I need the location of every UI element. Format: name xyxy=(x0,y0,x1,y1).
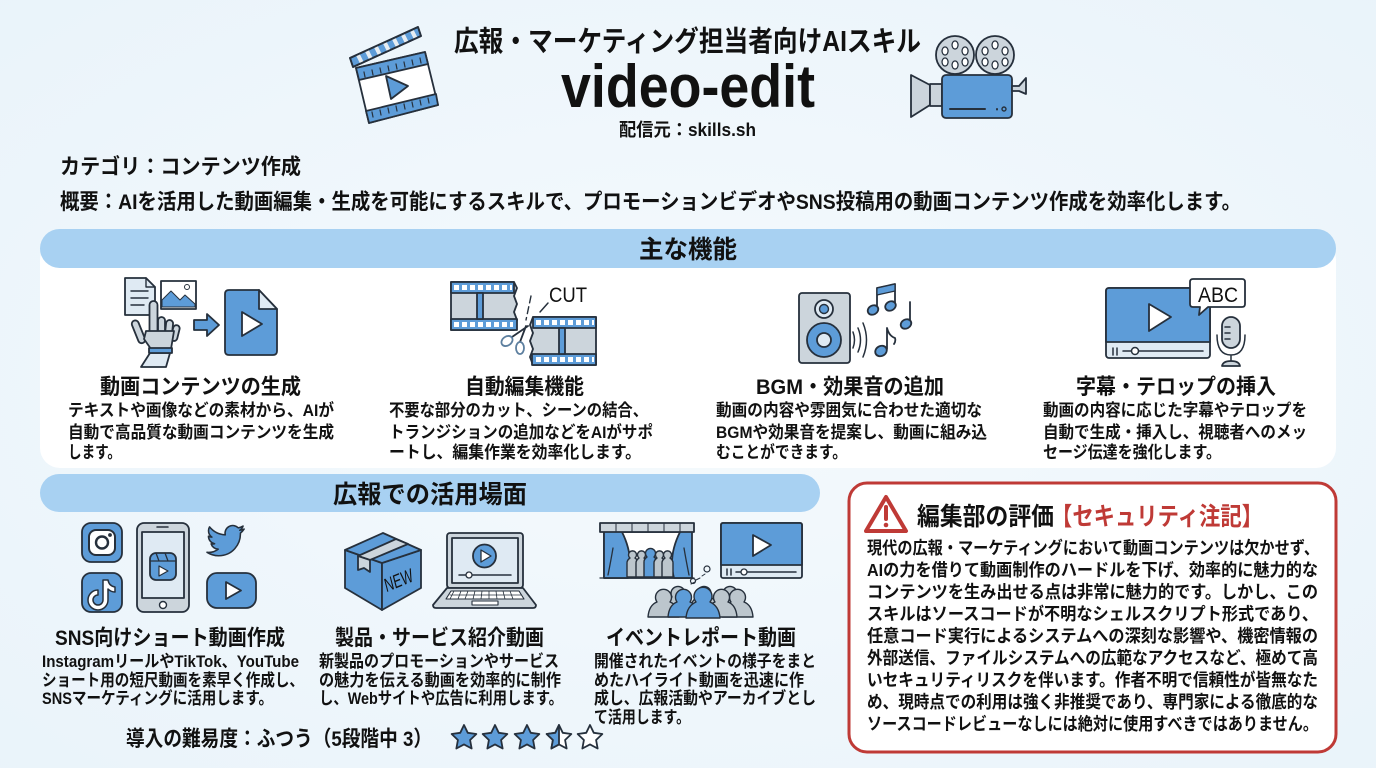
description: ートし、編集作業を効率化します。 xyxy=(389,443,641,462)
panel: PR use cases xyxy=(40,474,820,727)
description xyxy=(42,652,304,708)
description xyxy=(319,651,563,708)
description xyxy=(594,652,816,727)
description: します。 xyxy=(68,443,121,462)
description: の魅力を伝える動画を効率的に制作 xyxy=(319,670,561,690)
heading: BGM・効果音の追加 xyxy=(756,375,944,399)
heading: security note: 【セキュリティ注記】 xyxy=(1051,503,1263,531)
heading: 自動編集機能 xyxy=(465,375,584,399)
icon: speaker and music notes xyxy=(799,284,913,363)
description: むことができます。 xyxy=(716,442,847,462)
text: category: カテゴリ：コンテンツ作成 xyxy=(60,154,301,179)
description: 自動で高品質な動画コンテンツを生成 xyxy=(68,422,334,442)
description: 新製品のプロモーションやサービス xyxy=(319,651,559,671)
text: review body: AIの力を借りて動画制作のハードルを下げ、効率的に魅力的な xyxy=(867,560,1318,580)
panel: main features xyxy=(40,229,1336,468)
text: review body: 現代の広報・マーケティングにおいて動画コンテンツは欠かせず、 xyxy=(867,538,1319,558)
description: SNSマーケティングに活用します。 xyxy=(42,688,273,708)
icon: stage, video and audience xyxy=(600,523,802,618)
label: NEW: NEW xyxy=(381,565,418,597)
description: 自動で生成・挿入し、視聴者へのメッ xyxy=(1043,422,1307,442)
icon: movie camera xyxy=(911,36,1026,118)
description xyxy=(716,400,987,462)
label: ABC: ABC xyxy=(1198,284,1238,307)
text: review body: ソースコードレビューなしには絶対に使用すべきではありません。 xyxy=(867,714,1318,734)
icon: documents, robot hand and video file xyxy=(125,278,277,367)
use case: event report video xyxy=(594,523,816,727)
heading: 動画コンテンツの生成 xyxy=(100,375,301,399)
heading: review: 編集部の評価 xyxy=(917,503,1054,531)
title: video-edit: video-edit xyxy=(561,53,815,120)
feature: video generation xyxy=(68,278,334,462)
heading: イベントレポート動画 xyxy=(606,626,796,650)
description: トランジションの追加などをAIがサポ xyxy=(389,422,653,442)
icon: social apps and phone xyxy=(82,523,256,612)
description: 動画の内容に応じた字幕やテロップを xyxy=(1043,400,1307,420)
description: セージ伝達を強化します。 xyxy=(1043,443,1221,462)
heading banner: use cases: 広報での活用場面 xyxy=(333,481,527,509)
panel: editorial review with security note xyxy=(849,483,1336,752)
icon: box and laptop xyxy=(345,533,536,610)
description xyxy=(68,400,334,462)
description: ショート用の短尺動画を素早く作成し、 xyxy=(42,670,304,690)
description: InstagramリールやTikTok、YouTube xyxy=(42,652,299,671)
description: し、Webサイトや広告に利用します。 xyxy=(319,689,563,708)
description: テキストや画像などの素材から、AIが xyxy=(68,400,334,420)
heading banner: use cases xyxy=(40,474,820,512)
description: BGMや効果音を提案し、動画に組み込 xyxy=(716,422,987,442)
description: 開催されたイベントの様子をまと xyxy=(594,652,816,671)
icon: film clapperboard xyxy=(350,27,438,123)
icon: rating stars xyxy=(452,725,602,749)
heading: 製品・サービス紹介動画 xyxy=(335,626,544,650)
text: review body: め、現時点での利用は強く非推奨であり、専門家による徹底的な xyxy=(867,692,1318,712)
feature: auto edit xyxy=(389,282,653,462)
text: review body: スキルはソースコードが不明なシェルスクリプト形式であり、 xyxy=(867,604,1318,624)
text: review body: コンテンツを生み出せる点は非常に魅力的です。しかし、この xyxy=(867,582,1318,602)
text: overview: 概要：AIを活用した動画編集・生成を可能にするスキルで、プロモーションビデオやSNS投稿用の動画コンテンツ作成を効率化します。 xyxy=(60,189,1241,214)
text: review body: いセキュリティリスクを伴います。作者不明で信頼性が皆無なた xyxy=(867,670,1318,690)
icon: film cut with scissors xyxy=(451,282,596,365)
description: 不要な部分のカット、シーンの結合、 xyxy=(389,401,648,420)
title: subtitle: 広報・マーケティング担当者向けAIスキル xyxy=(454,25,921,58)
difficulty rating xyxy=(126,725,602,751)
text: review body: 外部送信、ファイルシステムへの広範なアクセスなど、極めて高 xyxy=(867,648,1318,668)
description xyxy=(389,401,653,462)
text: review body xyxy=(867,538,1319,734)
description: 動画の内容や雰囲気に合わせた適切な xyxy=(716,400,982,420)
use case: product video xyxy=(319,533,563,708)
description: めたハイライト動画を迅速に作 xyxy=(594,671,804,690)
text: source: 配信元：skills.sh xyxy=(619,120,756,140)
icon: video player, speech bubble and microphone xyxy=(1106,279,1245,366)
use case: SNS short video xyxy=(42,523,304,708)
heading: 字幕・テロップの挿入 xyxy=(1076,375,1276,399)
heading banner: main features xyxy=(40,229,1336,268)
heading: SNS向けショート動画作成 xyxy=(55,626,285,650)
heading banner: main features: 主な機能 xyxy=(639,236,737,264)
feature: BGM and sound effects xyxy=(716,284,987,462)
description: 成し、広報活動やアーカイブとし xyxy=(594,688,816,708)
description: て活用します。 xyxy=(594,708,690,727)
label: CUT: CUT xyxy=(549,284,587,307)
text: difficulty: 導入の難易度：ふつう（5段階中 3） xyxy=(126,727,432,751)
description xyxy=(1043,400,1307,462)
feature: subtitles xyxy=(1043,279,1307,462)
icon: warning triangle xyxy=(866,497,906,531)
text: review body: 任意コード実行によるシステムへの深刻な影響や、機密情報の xyxy=(867,626,1318,646)
